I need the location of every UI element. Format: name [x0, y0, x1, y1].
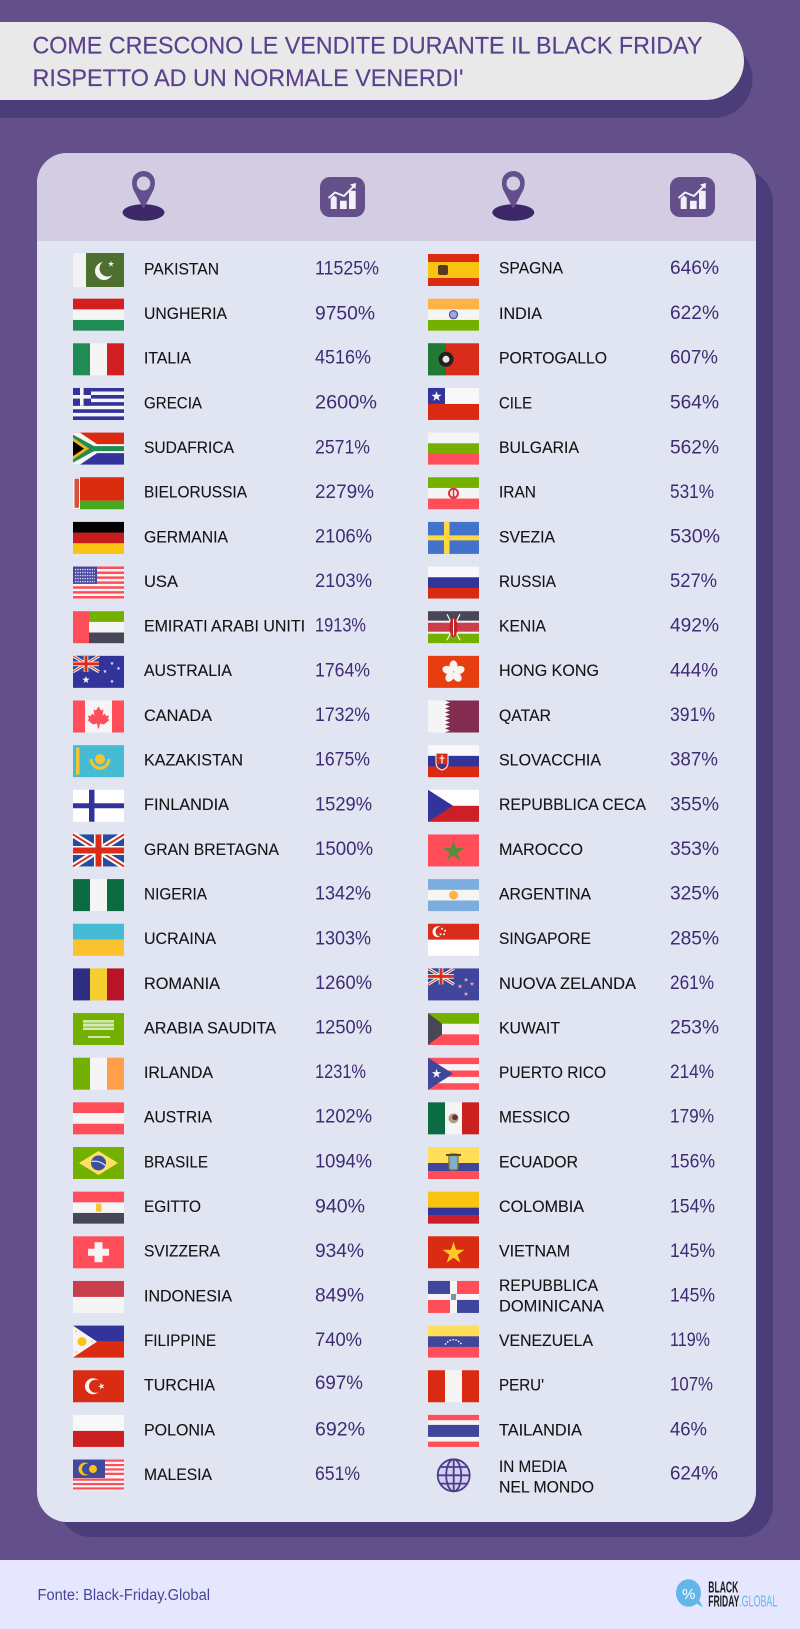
- flag: Brasile: [73, 1147, 124, 1179]
- flag: Svezia: [428, 522, 479, 554]
- row: Qatar: 391%: [670, 704, 715, 726]
- row: Polonia: 692%: [315, 1418, 365, 1440]
- row: Svezia: SVEZIA: [499, 527, 556, 546]
- row: Brasile: [73, 1147, 372, 1179]
- row: Slovacchia: 387%: [670, 748, 718, 770]
- row: Irlanda: 1231%: [315, 1061, 366, 1083]
- row: Indonesia: 849%: [315, 1284, 364, 1306]
- row: Kenia: KENIA: [499, 617, 547, 636]
- row: Repubblica Ceca: [428, 790, 719, 822]
- row: Canada: 1732%: [315, 704, 370, 726]
- flag: Singapore: [428, 924, 479, 956]
- row: Canada: CANADA: [144, 706, 213, 725]
- row: India: 622%: [670, 302, 719, 324]
- row: Peru': 107%: [670, 1374, 713, 1396]
- logo: Black Friday Global: %: [682, 1586, 695, 1603]
- icon: globe: [438, 1459, 470, 1491]
- row: Sudafrica: 2571%: [315, 436, 370, 458]
- row: Bulgaria: [428, 433, 719, 465]
- row: Nuova Zelanda: NUOVA ZELANDA: [499, 974, 637, 993]
- row: Gran Bretagna: GRAN BRETAGNA: [144, 840, 280, 859]
- flag: India: [428, 299, 479, 331]
- row: Venezuela: 119%: [670, 1329, 710, 1351]
- row: Repubblica Ceca: REPUBBLICA CECA: [499, 795, 647, 814]
- row: India: [428, 299, 719, 331]
- row: Ungheria: 9750%: [315, 302, 375, 324]
- flag: Cile: [428, 388, 479, 420]
- row: Nigeria: 1342%: [315, 882, 371, 904]
- row: Venezuela: VENEZUELA: [499, 1331, 594, 1350]
- row: Singapore: 285%: [670, 927, 719, 949]
- row: Germania: GERMANIA: [144, 527, 229, 546]
- row: Colombia: COLOMBIA: [499, 1197, 585, 1216]
- flag: Italia: [73, 343, 124, 375]
- flag: Spagna: [428, 254, 479, 286]
- footer: [0, 1560, 800, 1629]
- row: Vietnam: VIETNAM: [499, 1242, 570, 1261]
- row: Germania: [73, 522, 372, 554]
- flag: Arabia Saudita: [73, 1013, 124, 1045]
- row: Portogallo: PORTOGALLO: [499, 349, 607, 368]
- flag: Finlandia: [73, 790, 124, 822]
- row: Ucraina: 1303%: [315, 927, 371, 949]
- row: Polonia: POLONIA: [144, 1420, 216, 1439]
- row: Messico: 179%: [670, 1106, 714, 1128]
- row: Singapore: [428, 924, 719, 956]
- row: Portogallo: [428, 343, 718, 375]
- row: Austria: 1202%: [315, 1106, 372, 1128]
- row: India: INDIA: [499, 304, 543, 323]
- row: Cile: [428, 388, 719, 420]
- row: Tailandia: TAILANDIA: [499, 1420, 583, 1439]
- flag: Canada: [73, 700, 124, 732]
- row: Russia: [428, 567, 717, 599]
- row: Venezuela: [428, 1326, 710, 1358]
- row: Puerto Rico: [428, 1058, 714, 1090]
- row: Italia: 4516%: [315, 347, 371, 369]
- row: Brasile: BRASILE: [144, 1152, 208, 1171]
- row: Malesia: [73, 1460, 360, 1491]
- row: Colombia: [428, 1192, 715, 1224]
- icon: growth chart left: [320, 177, 365, 217]
- row: Arabia Saudita: ARABIA SAUDITA: [144, 1018, 277, 1037]
- row: Polonia: [73, 1415, 365, 1447]
- row: Malesia: MALESIA: [144, 1465, 213, 1484]
- flag: Bielorussia: [73, 477, 124, 509]
- row: Grecia: GRECIA: [144, 393, 203, 412]
- row: Marocco: MAROCCO: [499, 840, 583, 859]
- row: Slovacchia: [428, 745, 718, 777]
- row: Svizzera: SVIZZERA: [144, 1242, 221, 1261]
- flag: Peru': [428, 1370, 479, 1402]
- row: Marocco: [428, 834, 719, 866]
- row: Sudafrica: [73, 433, 370, 465]
- row: Bielorussia: [73, 477, 374, 509]
- row: Peru': [428, 1370, 713, 1402]
- row: Irlanda: IRLANDA: [144, 1063, 214, 1082]
- flag: Pakistan: [73, 253, 124, 287]
- row: Ungheria: [73, 299, 375, 331]
- row: Kuwait: 253%: [670, 1016, 719, 1038]
- flag: Australia: [73, 656, 124, 688]
- flag: Kazakistan: [73, 745, 124, 777]
- flag: Emirati Arabi Uniti: [73, 611, 124, 643]
- row: Bulgaria: BULGARIA: [499, 438, 580, 457]
- icon: growth chart right: [670, 177, 715, 217]
- row: Grecia: 2600%: [315, 391, 377, 413]
- flag: Ecuador: [428, 1147, 479, 1179]
- row: Ecuador: 156%: [670, 1150, 715, 1172]
- row: In media nel mondo: NEL MONDO: [499, 1477, 594, 1496]
- flag: Messico: [428, 1102, 479, 1134]
- row: Hong Kong: HONG KONG: [499, 661, 599, 680]
- row: In media nel mondo: 624%: [670, 1463, 718, 1485]
- row: Emirati Arabi Uniti: 1913%: [315, 615, 366, 637]
- row: Filippine: [73, 1326, 362, 1358]
- row: Argentina: ARGENTINA: [499, 884, 592, 903]
- flag: Ungheria: [73, 299, 124, 331]
- row: Nigeria: [73, 879, 371, 911]
- row: Kenia: 492%: [670, 615, 719, 637]
- row: Messico: [428, 1102, 714, 1134]
- row: Cile: CILE: [499, 393, 532, 412]
- row: Turchia: [73, 1370, 363, 1402]
- logo: Black Friday Global: BLACK: [708, 1580, 739, 1597]
- row: Italia: ITALIA: [144, 349, 192, 368]
- row: Slovacchia: SLOVACCHIA: [499, 751, 602, 770]
- row: Svizzera: 934%: [315, 1240, 364, 1262]
- row: Nuova Zelanda: 261%: [670, 972, 714, 994]
- row: Repubblica Dominicana: DOMINICANA: [499, 1296, 605, 1315]
- flag: Polonia: [73, 1415, 124, 1447]
- row: Romania: [73, 968, 372, 1000]
- row: Nigeria: NIGERIA: [144, 884, 208, 903]
- row: Bielorussia: BIELORUSSIA: [144, 483, 248, 502]
- flag: Slovacchia: [428, 745, 479, 777]
- row: Malesia: 651%: [315, 1463, 360, 1485]
- flag: Marocco: [428, 834, 479, 866]
- flag: Grecia: [73, 388, 124, 420]
- flag: Portogallo: [428, 343, 479, 375]
- flag: Iran: [428, 477, 479, 509]
- title banner: [0, 22, 752, 118]
- row: Tailandia: 46%: [670, 1418, 707, 1440]
- flag: Irlanda: [73, 1058, 124, 1090]
- flag: Germania: [73, 522, 124, 554]
- flag: Vietnam: [428, 1236, 479, 1268]
- flag: Egitto: [73, 1192, 124, 1224]
- row: Kenia: [428, 611, 719, 643]
- flag: Malesia: [73, 1460, 124, 1491]
- flag: Repubblica Ceca: [428, 790, 479, 822]
- flag: Gran Bretagna: [73, 834, 124, 866]
- row: Finlandia: FINLANDIA: [144, 795, 230, 814]
- row: Tailandia: [428, 1415, 707, 1447]
- row: Bielorussia: 2279%: [315, 481, 374, 503]
- row: Sudafrica: SUDAFRICA: [144, 438, 235, 457]
- row: Qatar: [428, 700, 715, 732]
- row: Peru': PERU': [499, 1375, 544, 1394]
- flag: Kenia: [428, 611, 479, 643]
- row: Egitto: [73, 1192, 365, 1224]
- row: Grecia: [73, 388, 377, 420]
- row: Filippine: FILIPPINE: [144, 1331, 216, 1350]
- flag: Puerto Rico: [428, 1058, 479, 1090]
- row: Finlandia: [73, 790, 372, 822]
- row: Hong Kong: [428, 656, 718, 688]
- icon: location pin right: [492, 171, 534, 221]
- row: Kuwait: KUWAIT: [499, 1018, 560, 1037]
- row: Kuwait: [428, 1013, 719, 1045]
- row: Svizzera: [73, 1236, 364, 1268]
- row: Repubblica Dominicana: REPUBBLICA: [499, 1276, 599, 1295]
- row: Gran Bretagna: 1500%: [315, 838, 373, 860]
- flag: USA: [73, 567, 124, 599]
- flag: Romania: [73, 968, 124, 1000]
- row: Portogallo: 607%: [670, 347, 718, 369]
- row: Messico: MESSICO: [499, 1108, 570, 1127]
- source note: Fonte: Black-Friday.Global: [38, 1587, 210, 1604]
- row: In media nel mondo: IN MEDIA: [499, 1457, 568, 1476]
- flag: Qatar: [428, 700, 479, 732]
- row: Vietnam: 145%: [670, 1240, 715, 1262]
- row: Indonesia: INDONESIA: [144, 1286, 233, 1305]
- flag: Argentina: [428, 879, 479, 911]
- row: Argentina: 325%: [670, 882, 719, 904]
- row: Kazakistan: 1675%: [315, 748, 370, 770]
- row: Spagna: SPAGNA: [499, 258, 564, 277]
- flag: Indonesia: [73, 1281, 124, 1313]
- row: Iran: IRAN: [499, 483, 536, 502]
- row: Egitto: EGITTO: [144, 1197, 201, 1216]
- row: In media nel mondo: [438, 1457, 718, 1496]
- row: Pakistan: [73, 253, 379, 287]
- row: Ungheria: UNGHERIA: [144, 304, 228, 323]
- title: RISPETTO AD UN NORMALE VENERDI': [32, 65, 464, 92]
- row: Austria: AUSTRIA: [144, 1108, 213, 1127]
- row: Hong Kong: 444%: [670, 660, 718, 682]
- row: Ucraina: UCRAINA: [144, 929, 217, 948]
- row: Repubblica Dominicana: 145%: [670, 1285, 715, 1307]
- row: Romania: ROMANIA: [144, 974, 221, 993]
- row: Italia: [73, 343, 371, 375]
- row: Filippine: 740%: [315, 1329, 362, 1351]
- flag: Tailandia: [428, 1415, 479, 1447]
- flag: Turchia: [73, 1370, 124, 1402]
- row: Puerto Rico: PUERTO RICO: [499, 1063, 606, 1082]
- row: Turchia: TURCHIA: [144, 1376, 216, 1395]
- row: Gran Bretagna: [73, 834, 373, 866]
- flag: Austria: [73, 1102, 124, 1134]
- title: COME CRESCONO LE VENDITE DURANTE IL BLACK FRIDAY: [32, 32, 702, 60]
- row: Vietnam: [428, 1236, 715, 1268]
- flag: Nuova Zelanda: [428, 968, 479, 1000]
- flag: Venezuela: [428, 1326, 479, 1358]
- row: Marocco: 353%: [670, 838, 719, 860]
- row: Bulgaria: 562%: [670, 436, 719, 458]
- flag: Svizzera: [73, 1236, 124, 1268]
- row: Cile: 564%: [670, 391, 719, 413]
- table header: [37, 153, 756, 241]
- icon: location pin left: [122, 171, 164, 221]
- flag: Nigeria: [73, 879, 124, 911]
- panel: country table: [37, 153, 756, 1522]
- row: Finlandia: 1529%: [315, 793, 372, 815]
- row: Ucraina: [73, 924, 371, 956]
- row: USA: USA: [144, 572, 179, 591]
- row: Kazakistan: [73, 745, 370, 777]
- row: Nuova Zelanda: [428, 968, 714, 1000]
- row: Kazakistan: KAZAKISTAN: [144, 751, 243, 770]
- row: Arabia Saudita: [73, 1013, 372, 1045]
- row: Colombia: 154%: [670, 1195, 715, 1217]
- row: Spagna: 646%: [670, 257, 719, 279]
- row: Indonesia: [73, 1281, 364, 1313]
- row: Australia: AUSTRALIA: [144, 661, 233, 680]
- flag: Colombia: [428, 1192, 479, 1224]
- row: Emirati Arabi Uniti: EMIRATI ARABI UNITI: [144, 617, 305, 636]
- row: Australia: [73, 656, 370, 688]
- logo: Black Friday Global: FRIDAY: [708, 1594, 739, 1611]
- row: Irlanda: [73, 1058, 366, 1090]
- row: Australia: 1764%: [315, 660, 370, 682]
- row: Egitto: 940%: [315, 1195, 365, 1217]
- row: Ecuador: ECUADOR: [499, 1152, 578, 1171]
- row: Repubblica Dominicana: [428, 1276, 715, 1315]
- row: Turchia: 697%: [315, 1372, 363, 1394]
- panel shadow: [59, 170, 773, 1537]
- row: Germania: 2106%: [315, 526, 372, 548]
- row: Brasile: 1094%: [315, 1150, 372, 1172]
- row: Iran: [428, 477, 714, 509]
- row: Romania: 1260%: [315, 972, 372, 994]
- flag: Repubblica Dominicana: [428, 1281, 479, 1313]
- row: Repubblica Ceca: 355%: [670, 793, 719, 815]
- row: Pakistan: PAKISTAN: [144, 259, 219, 278]
- row: Singapore: SINGAPORE: [499, 929, 591, 948]
- row: Russia: 527%: [670, 570, 717, 592]
- row: USA: 2103%: [315, 570, 372, 592]
- row: Canada: [73, 700, 370, 732]
- flag: Kuwait: [428, 1013, 479, 1045]
- row: Argentina: [428, 879, 719, 911]
- flag: Russia: [428, 567, 479, 599]
- row: Svezia: [428, 522, 720, 554]
- logo: Black Friday Global: [676, 1579, 777, 1611]
- row: Ecuador: [428, 1147, 715, 1179]
- row: Russia: RUSSIA: [499, 572, 557, 591]
- flag: Bulgaria: [428, 433, 479, 465]
- row: Puerto Rico: 214%: [670, 1061, 714, 1083]
- flag: Ucraina: [73, 924, 124, 956]
- row: Austria: [73, 1102, 372, 1134]
- row: USA: [73, 567, 372, 599]
- flag: Sudafrica: [73, 433, 124, 465]
- row: Svezia: 530%: [670, 526, 720, 548]
- row: Emirati Arabi Uniti: [73, 611, 366, 643]
- flag: Hong Kong: [428, 656, 479, 688]
- row: Arabia Saudita: 1250%: [315, 1016, 372, 1038]
- title: [32, 32, 702, 92]
- row: Spagna: [428, 254, 719, 286]
- flag: Filippine: [73, 1326, 124, 1358]
- row: Qatar: QATAR: [499, 706, 551, 725]
- row: Iran: 531%: [670, 481, 714, 503]
- row: Pakistan: 11525%: [315, 258, 379, 280]
